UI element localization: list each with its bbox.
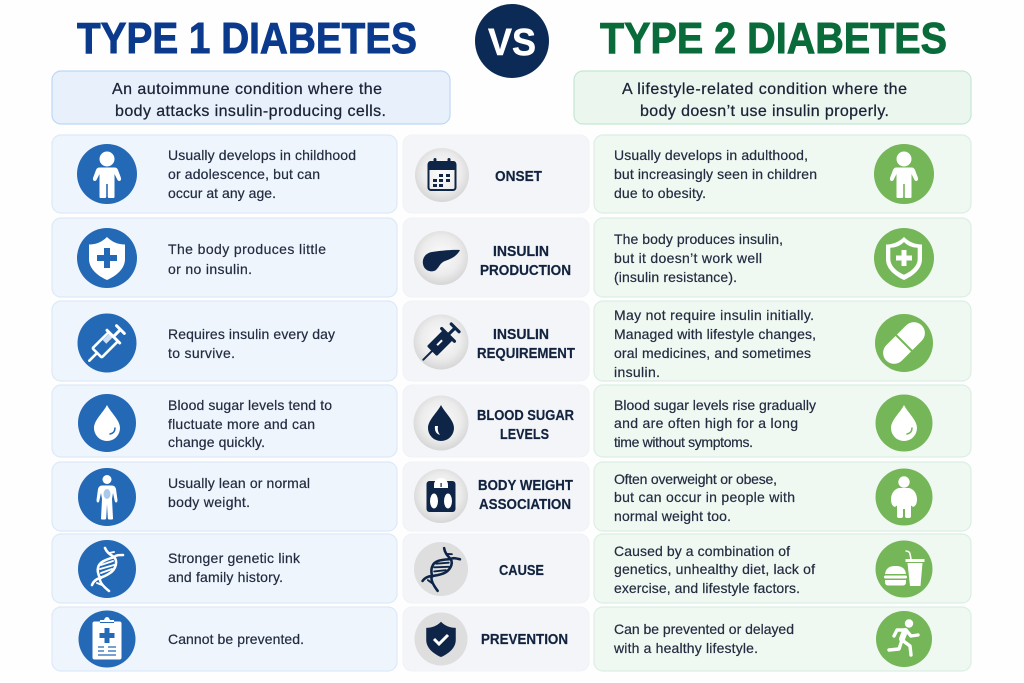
row: cause, type 2: genetics, unhealthy diet, lack of <box>614 561 815 577</box>
row: insulin requirement, type 1: Requires insulin every day <box>168 326 335 342</box>
row: cause, type 2: Caused by a combination of <box>614 543 790 559</box>
row: prevention, type 2 <box>594 607 971 671</box>
row: insulin production, type 2: The body produces insulin, <box>614 231 783 247</box>
icon: shield with check <box>414 612 468 666</box>
icon: burger and drink <box>876 540 932 598</box>
row: cause, label <box>403 534 589 603</box>
icon: syringe <box>78 314 136 372</box>
row: body weight, type 2: normal weight too. <box>614 508 731 524</box>
row: blood sugar, type 1: change quickly. <box>168 434 265 450</box>
row: onset, type 2: due to obesity. <box>614 185 706 201</box>
icon: shield with cross <box>77 228 137 288</box>
row: blood sugar, type 2 <box>594 385 971 457</box>
row: onset, label <box>403 135 589 213</box>
row: prevention, type 1 <box>52 607 397 671</box>
row: cause, type 1: Stronger genetic link <box>168 550 301 566</box>
icon: pill capsule <box>875 314 933 372</box>
row: body weight, type 1: Usually lean or normal <box>168 475 310 491</box>
icon: child <box>874 144 934 204</box>
row: body weight, type 2 <box>594 462 971 531</box>
row: body weight, type 2: Often overweight or obese, <box>614 471 777 487</box>
row: blood sugar, label: BLOOD SUGAR <box>477 408 574 424</box>
row: prevention, type 1: Cannot be prevented. <box>168 631 304 647</box>
panel: type 1 definition: body attacks insulin-producing cells. <box>115 103 386 120</box>
badge: VS: VS <box>488 22 536 64</box>
row: insulin production, type 1 <box>52 218 397 297</box>
icon: blood drop <box>414 396 468 450</box>
row: prevention, type 2: with a healthy lifestyle. <box>613 640 758 656</box>
icon: calendar <box>415 148 469 202</box>
icon: pancreas <box>414 231 468 285</box>
row: insulin requirement, type 2: oral medicines, and sometimes <box>614 345 811 361</box>
row: insulin production, type 2: but it doesn’t work well <box>614 250 762 266</box>
icon: DNA helix <box>78 540 136 598</box>
icon: blood drop <box>876 394 932 452</box>
row: insulin requirement, type 2: Managed with lifestyle changes, <box>614 326 816 342</box>
icon: lean body <box>78 468 136 526</box>
icon: runner <box>876 611 932 667</box>
row: blood sugar, type 1: fluctuate more and can <box>168 416 315 432</box>
row: onset, type 1: Usually develops in childhood <box>168 147 356 163</box>
row: insulin production, label: INSULIN <box>493 244 549 260</box>
row: blood sugar, label: LEVELS <box>500 427 549 443</box>
row: insulin requirement, label: REQUIREMENT <box>477 346 575 362</box>
row: blood sugar, type 1: Blood sugar levels tend to <box>168 397 332 413</box>
icon: blood drop <box>78 394 136 452</box>
row: onset, type 2 <box>594 135 971 213</box>
row: insulin requirement, type 1 <box>52 301 397 381</box>
row: prevention, label <box>403 607 589 671</box>
title: type 1 diabetes: TYPE 1 DIABETES <box>77 14 417 63</box>
row: insulin requirement, type 2: insulin. <box>614 364 660 380</box>
row: onset, type 1: occur at any age. <box>168 185 276 201</box>
row: onset, type 2: but increasingly seen in children <box>614 166 817 182</box>
row: insulin requirement, type 1: to survive. <box>168 345 235 361</box>
row: insulin requirement, type 2: May not require insulin initially. <box>614 307 814 323</box>
row: blood sugar, type 2: time without symptoms. <box>614 434 753 450</box>
row: onset, type 1 <box>52 135 397 213</box>
row: insulin production, type 2: (insulin resistance). <box>614 269 737 285</box>
row: insulin production, type 2 <box>594 218 971 297</box>
icon: shield outline with cross <box>874 228 934 288</box>
row: body weight, label: BODY WEIGHT <box>478 478 573 494</box>
row: blood sugar, type 2: Blood sugar levels rise gradually <box>614 397 816 413</box>
row: onset, type 1: or adolescence, but can <box>168 166 320 182</box>
icon: child <box>77 144 137 204</box>
panel: type 1 definition: An autoimmune condition where the <box>112 81 382 98</box>
row: prevention, type 2: Can be prevented or delayed <box>614 621 794 637</box>
panel: type 2 definition: A lifestyle-related condition where the <box>622 81 907 98</box>
row: blood sugar, label <box>403 385 589 457</box>
icon: weighing scale <box>414 469 468 523</box>
row: blood sugar, type 2: and are often high for a long <box>614 415 798 431</box>
row: onset, label: ONSET <box>495 169 542 185</box>
row: cause, type 1: and family history. <box>168 569 283 585</box>
row: onset, type 2: Usually develops in adulthood, <box>614 147 808 163</box>
row: prevention, label: PREVENTION <box>481 632 568 648</box>
icon: medical clipboard <box>78 610 136 668</box>
icon: heavier body <box>876 468 932 526</box>
panel: type 1 definition <box>52 71 450 124</box>
row: insulin requirement, label: INSULIN <box>493 327 549 343</box>
row: body weight, label: ASSOCIATION <box>479 497 571 513</box>
row: insulin requirement, type 2 <box>594 301 971 381</box>
row: cause, type 2: exercise, and lifestyle factors. <box>614 580 800 596</box>
row: body weight, label <box>403 462 589 531</box>
row: body weight, type 2: but can occur in people with <box>614 489 795 505</box>
panel: type 2 definition <box>574 71 971 124</box>
row: cause, label: CAUSE <box>499 563 544 579</box>
panel: type 2 definition: body doesn’t use insulin properly. <box>640 103 889 120</box>
row: insulin production, label <box>403 218 589 297</box>
badge: VS <box>475 4 549 78</box>
title: type 2 diabetes: TYPE 2 DIABETES <box>600 14 947 63</box>
row: insulin production, label: PRODUCTION <box>480 263 571 279</box>
row: blood sugar, type 1 <box>52 385 397 457</box>
row: body weight, type 1: body weight. <box>168 494 250 510</box>
icon: DNA helix <box>414 542 468 596</box>
row: cause, type 2 <box>594 534 971 603</box>
row: insulin production, type 1: or no insulin. <box>168 261 252 277</box>
icon: syringe <box>414 314 468 370</box>
row: insulin requirement, label <box>403 301 589 381</box>
row: insulin production, type 1: The body produces little <box>168 241 326 257</box>
row: cause, type 1 <box>52 534 397 603</box>
row: body weight, type 1 <box>52 462 397 531</box>
